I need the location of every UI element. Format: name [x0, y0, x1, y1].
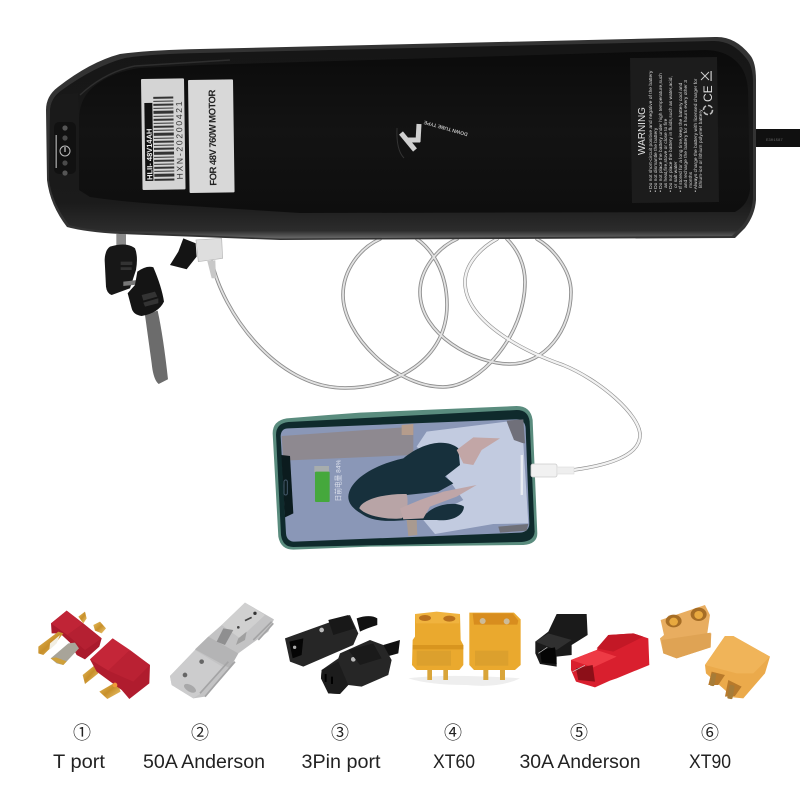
caption: T port	[53, 723, 106, 773]
caption: XT90	[689, 723, 731, 773]
caption: 50A Anderson: ②	[191, 723, 209, 743]
caption: T port: ①	[73, 723, 91, 743]
motor label: FOR 48V 760W MOTOR	[207, 90, 219, 186]
barcode label: HXN-20200421	[174, 101, 185, 180]
XT90 lower housing	[705, 636, 770, 698]
caption: 50A Anderson	[143, 723, 265, 773]
warning label: and recharge the battery for 3 hours every other 3	[683, 80, 689, 188]
USB plug	[196, 238, 223, 262]
caption: 30A Anderson	[520, 723, 640, 773]
key fob one	[105, 245, 137, 295]
key stem	[116, 234, 126, 248]
warning label: • Do not dismantle the battery	[653, 127, 659, 192]
caption: XT90: XT90	[689, 752, 731, 773]
warning label: or salt water	[673, 161, 679, 188]
caption: XT90: ⑥	[701, 723, 719, 743]
HL logo: DOWN TUBE TYPE	[423, 118, 469, 137]
face	[359, 494, 408, 519]
caption: XT60: XT60	[433, 752, 475, 773]
caption: 30A Anderson: 30A Anderson	[520, 752, 640, 773]
battery charge icon	[314, 459, 343, 502]
connector: XT90	[660, 605, 770, 699]
male body	[285, 615, 358, 667]
connector: XT60	[408, 612, 521, 686]
caption: 30A Anderson: ⑤	[570, 723, 588, 743]
screen	[281, 419, 529, 542]
warning label: WARNING	[637, 107, 648, 155]
wall band	[282, 427, 413, 461]
caption: 3Pin port: 3Pin port	[302, 752, 381, 773]
cable: USB cord looping to phone	[212, 239, 640, 470]
power indicator	[54, 122, 76, 176]
female plug	[83, 638, 150, 699]
red housing	[571, 633, 649, 687]
XT90 upper housing	[660, 605, 711, 658]
home bar	[521, 455, 523, 495]
motor label	[188, 79, 235, 193]
key blade	[145, 311, 168, 384]
HL logo	[397, 118, 469, 158]
caption: XT60: ④	[444, 723, 462, 743]
warning label: lithium-ion or lithium polymer battery	[698, 109, 704, 188]
warning label: • Do not short-circuit positive and negative of the battery	[648, 70, 654, 192]
caption: T port: T port	[53, 752, 106, 773]
male plug	[38, 611, 106, 665]
warning label: • Do not place the battery in fluids,such as water,acid,	[668, 76, 674, 192]
barcode label	[141, 78, 186, 190]
front face	[79, 50, 750, 213]
warning label: months	[688, 171, 694, 188]
notch	[281, 455, 293, 517]
phone USB plug	[531, 464, 574, 477]
caption: 50A Anderson: 50A Anderson	[143, 752, 265, 773]
black housing	[535, 614, 588, 667]
keys and USB plug	[105, 234, 223, 384]
battery power cord	[756, 129, 800, 147]
connector: 3Pin port	[285, 615, 400, 694]
caption: XT60	[433, 723, 475, 773]
connector: 50A Anderson	[170, 603, 274, 698]
battery power cord: E301587	[766, 139, 783, 143]
key ring	[123, 278, 152, 286]
battery body	[49, 41, 753, 238]
phone	[273, 406, 537, 550]
warning label: as heat,fire,stove or close to fire	[663, 118, 669, 188]
warning label: • Always charge the battery with licensed charger for	[693, 78, 699, 192]
hands	[457, 437, 500, 465]
barcode label: HLII- 48V14AH	[145, 129, 154, 180]
battery charge icon: 日前电量 84%	[334, 459, 343, 501]
phone case	[273, 406, 537, 550]
battery shell	[46, 37, 756, 240]
hair	[348, 443, 464, 521]
warning label: • If stored for a long time,keep the battery cool and	[678, 82, 684, 192]
female body	[321, 640, 392, 694]
connector: 30A Anderson	[535, 614, 649, 687]
connector: T port	[38, 611, 150, 699]
shirt	[417, 422, 528, 534]
warning label	[630, 57, 719, 203]
caption: 3Pin port: ③	[331, 723, 349, 743]
battery pack	[46, 37, 756, 240]
left end panel	[49, 93, 79, 190]
caption: 3Pin port	[302, 723, 381, 773]
warning icons: CE	[701, 85, 715, 102]
warning label: • Do not place the battery under high temperature,such	[658, 73, 664, 192]
rubber cap	[170, 238, 197, 269]
top left contour	[80, 60, 230, 95]
key fob two	[128, 267, 164, 316]
warning icons	[701, 71, 715, 114]
